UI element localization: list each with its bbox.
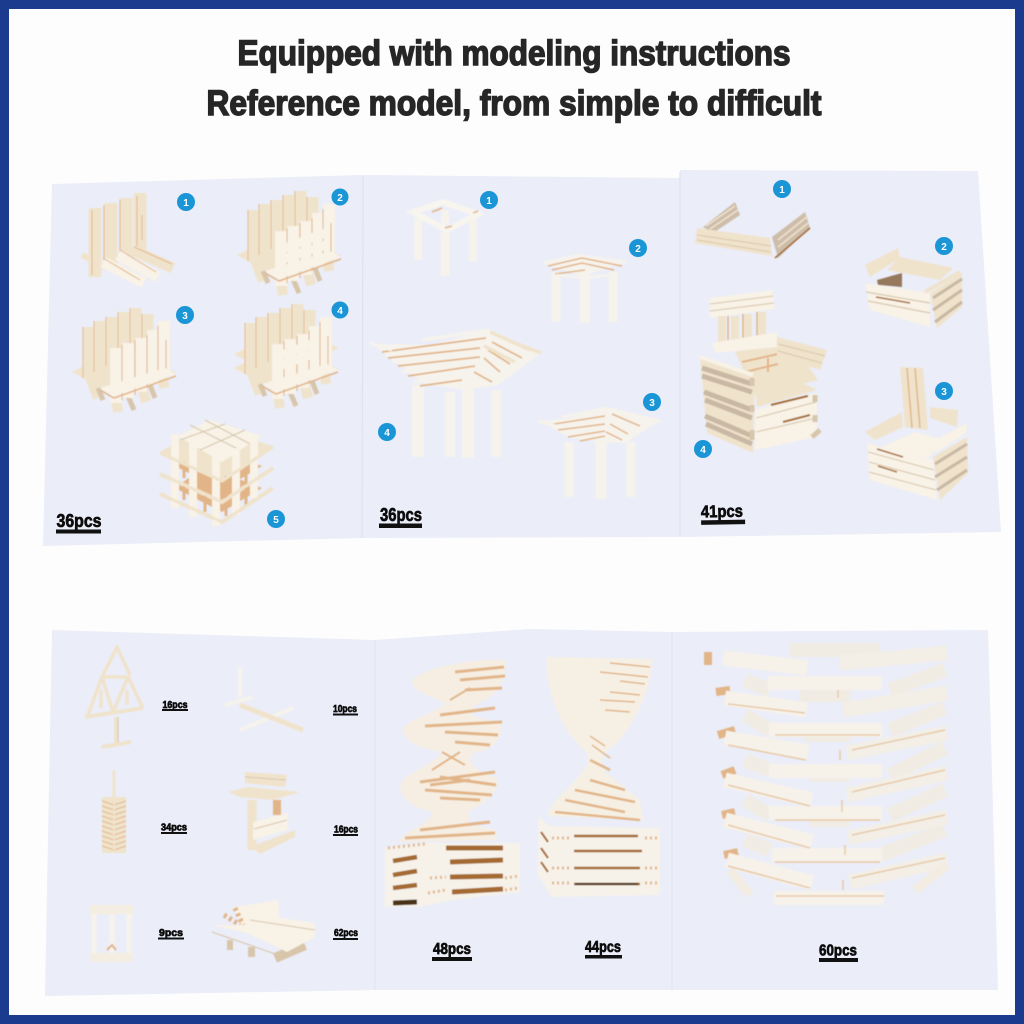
model: step 4 finished chair — [700, 290, 827, 453]
model: cross — [225, 667, 303, 730]
top instruction sheet — [43, 170, 1001, 546]
tower legs — [730, 865, 947, 895]
badges: step numbers: 3 — [649, 398, 655, 409]
model: step 2 slats — [237, 191, 342, 295]
helix base — [385, 843, 520, 907]
tower left boards — [723, 658, 812, 883]
model: step 1 table frame — [413, 202, 478, 276]
panel: 36pcs block models — [72, 191, 342, 526]
model: tree — [85, 647, 143, 747]
hourglass twist — [547, 657, 652, 820]
badges: step numbers: 4 — [700, 445, 706, 456]
badges: step numbers: 2 — [941, 242, 947, 253]
badges: step numbers: 3 — [941, 387, 947, 398]
model: step 5 cube — [160, 420, 273, 526]
tower orange end pieces — [708, 652, 738, 855]
labels: small pcs: 9pcs — [159, 928, 183, 939]
title — [206, 34, 822, 123]
helix twist — [398, 660, 505, 842]
title: Equipped with modeling instructions — [238, 34, 790, 73]
panel: 41pcs chair models — [695, 202, 968, 500]
model: step 3 slats — [72, 308, 177, 412]
model: round tower 60pcs — [708, 650, 947, 898]
label: 60pcs: 60pcs — [819, 942, 857, 960]
badges: step numbers: 1 — [183, 198, 189, 209]
hourglass wood grain — [590, 663, 650, 758]
model: helix 48pcs — [385, 660, 520, 907]
model: step 3 chair with back — [865, 367, 968, 500]
helix wood grain — [405, 667, 505, 838]
tower wood grain — [728, 690, 945, 896]
model: stack — [102, 770, 126, 853]
model: frame — [90, 905, 133, 962]
badges: step numbers: 2 — [337, 193, 343, 204]
label: 48pcs: 48pcs — [433, 941, 471, 958]
labels: small pcs: 16pcs — [334, 824, 358, 836]
panel: 36pcs table models — [370, 202, 661, 499]
label: 44pcs: 44pcs — [585, 939, 621, 956]
title: Reference model, from simple to difficult — [206, 84, 822, 123]
label: 36pcs second: 36pcs — [380, 505, 422, 525]
label: 41pcs: 41pcs — [701, 502, 743, 521]
model: step 2 table roof — [543, 254, 627, 323]
badges: step numbers: 5 — [273, 515, 279, 526]
tower rear boards — [745, 650, 945, 855]
panel: small models — [85, 647, 315, 962]
hourglass base — [538, 817, 660, 897]
model: step 4 slats — [234, 304, 339, 408]
model: step 2 chair frame — [865, 248, 962, 328]
model: step 3 medium roof — [538, 407, 661, 499]
model: step 1 planks — [82, 193, 173, 283]
model: step 1 chair base — [695, 202, 810, 258]
model: sofa — [212, 900, 315, 958]
badges: step numbers: 4 — [337, 306, 343, 317]
labels: small pcs — [158, 700, 358, 940]
labels: small pcs: 10pcs — [333, 704, 357, 715]
model: bench — [228, 772, 300, 854]
tower right boards — [840, 653, 947, 882]
bottom instruction sheet — [45, 629, 998, 996]
badges: step numbers: 1 — [779, 185, 785, 196]
badges: step numbers: 3 — [182, 311, 188, 322]
badges: step numbers: 1 — [486, 196, 492, 207]
labels: small pcs: 62pcs — [334, 928, 358, 939]
model: hourglass 44pcs — [538, 657, 660, 897]
labels: small pcs: 16pcs — [162, 700, 188, 711]
tower center boards — [768, 683, 884, 898]
badges: step numbers: 2 — [635, 244, 641, 255]
model: step 4 large roof — [370, 330, 541, 458]
label: 36pcs first: 36pcs — [56, 511, 102, 531]
badges: step numbers — [176, 180, 953, 528]
badges: step numbers: 4 — [384, 428, 390, 439]
labels: small pcs: 34pcs — [161, 822, 187, 834]
